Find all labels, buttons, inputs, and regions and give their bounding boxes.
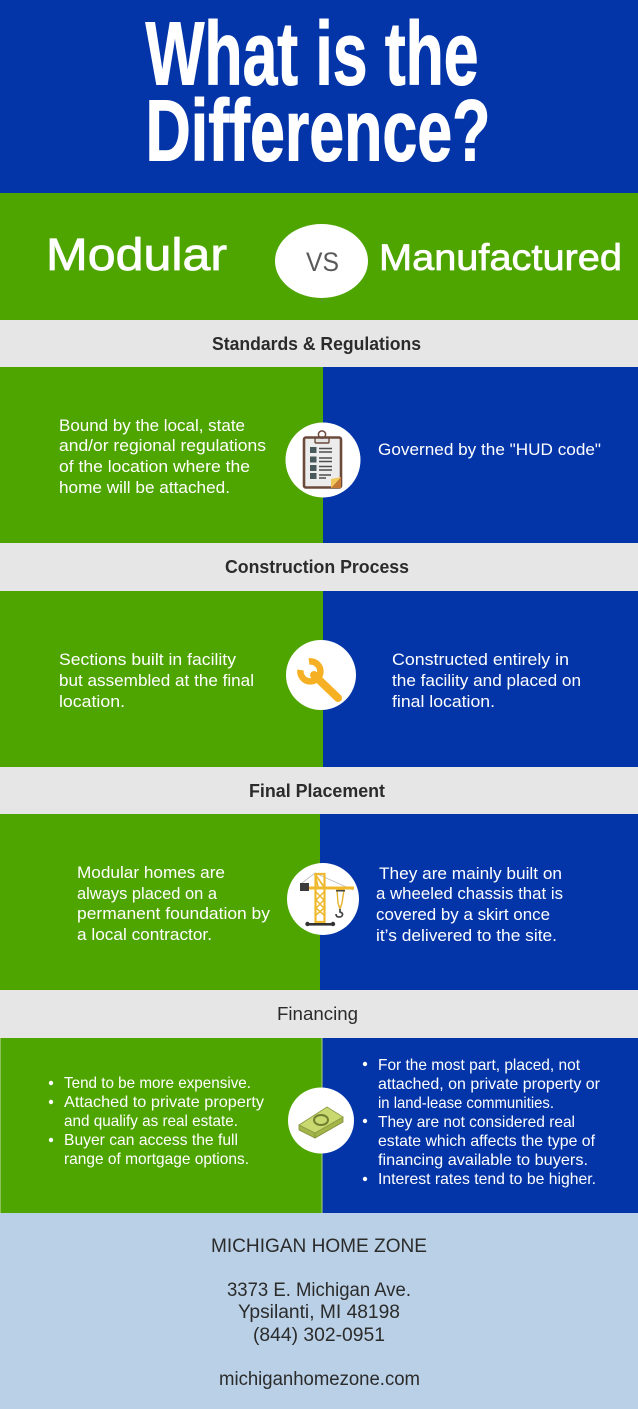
text: manufactured financing — [363, 1057, 601, 1188]
section heading: standards: Standards & Regulations — [212, 334, 421, 354]
address — [227, 1280, 411, 1346]
section heading: final placement: Final Placement — [249, 781, 385, 801]
text: modular financing: and qualify as real estate. — [64, 1113, 238, 1130]
title: Difference? — [146, 82, 490, 180]
text: modular financing — [49, 1075, 264, 1168]
text: modular construction: location. — [59, 692, 125, 711]
panel: placement comparison — [0, 814, 638, 990]
text: manufactured placement: covered by a skirt once — [376, 905, 550, 924]
website: michiganhomezone.com — [219, 1369, 420, 1390]
text: manufactured placement — [376, 864, 563, 945]
text: manufactured construction: final location. — [392, 692, 495, 711]
title — [146, 4, 490, 180]
text: modular financing: Attached to private property — [64, 1094, 264, 1111]
heading: manufactured: Manufactured — [379, 237, 622, 278]
text: modular placement: permanent foundation by — [77, 904, 270, 923]
text: modular construction — [59, 650, 254, 711]
text: modular standards: home will be attached. — [59, 478, 230, 497]
section heading: construction: Construction Process — [225, 557, 409, 577]
text: modular financing: Tend to be more expensive. — [64, 1075, 251, 1092]
section heading: financing — [0, 990, 638, 1038]
title: What is the — [146, 4, 478, 104]
text: modular standards — [59, 416, 266, 497]
text: modular standards: Bound by the local, state — [59, 416, 245, 435]
icon: wrench — [286, 640, 356, 710]
section heading: financing: Financing — [277, 1004, 358, 1024]
text: manufactured construction: the facility and placed on — [392, 671, 581, 690]
text: modular financing: Buyer can access the full — [64, 1132, 238, 1149]
text: manufactured construction: Constructed entirely in — [392, 650, 569, 669]
vs badge: VS — [306, 247, 339, 277]
vs badge — [275, 224, 368, 302]
panel: title header — [0, 0, 638, 193]
text: manufactured placement: a wheeled chassis that is — [376, 884, 563, 903]
icon: clipboard — [286, 422, 360, 498]
text: manufactured financing: estate which affects the type of — [378, 1133, 596, 1150]
text: manufactured construction — [392, 650, 581, 711]
text: manufactured financing: attached, on private property or — [378, 1076, 601, 1093]
panel: footer contact — [0, 1213, 638, 1409]
text: modular placement — [77, 863, 270, 944]
text: manufactured financing: financing available to buyers. — [378, 1152, 588, 1169]
panel: financing comparison — [0, 1038, 638, 1213]
company name: MICHIGAN HOME ZONE — [211, 1236, 427, 1257]
panel: standards comparison — [0, 367, 638, 543]
heading: modular: Modular — [46, 229, 227, 280]
text: manufactured financing: For the most part, placed, not — [378, 1057, 581, 1074]
text: modular financing: range of mortgage options. — [64, 1151, 249, 1168]
panel: construction comparison — [0, 591, 638, 767]
text: modular placement: a local contractor. — [77, 925, 212, 944]
address: (844) 302-0951 — [253, 1325, 385, 1346]
text: manufactured placement: it’s delivered to the site. — [376, 926, 557, 945]
text: modular standards: and/or regional regulations — [59, 436, 266, 455]
address: Ypsilanti, MI 48198 — [238, 1302, 400, 1323]
icon: money stack — [288, 1088, 354, 1154]
text: manufactured standards: Governed by the "HUD code" — [378, 440, 601, 459]
text: manufactured financing: They are not considered real — [378, 1114, 575, 1131]
text: manufactured financing: in land-lease communities. — [378, 1095, 554, 1112]
text: modular placement: Modular homes are — [77, 863, 225, 882]
text: manufactured placement: They are mainly built on — [379, 864, 562, 883]
section heading: final placement — [0, 767, 638, 814]
text: modular construction: Sections built in facility — [59, 650, 237, 669]
text: manufactured financing: Interest rates tend to be higher. — [378, 1171, 596, 1188]
text: modular construction: but assembled at the final — [59, 671, 254, 690]
address: 3373 E. Michigan Ave. — [227, 1280, 411, 1301]
text: modular placement: always placed on a — [77, 884, 218, 903]
icon: crane — [287, 863, 359, 935]
section heading: construction — [0, 543, 638, 591]
text: modular standards: of the location where the — [59, 457, 250, 476]
section heading: standards — [0, 320, 638, 367]
panel: versus band — [0, 193, 638, 320]
